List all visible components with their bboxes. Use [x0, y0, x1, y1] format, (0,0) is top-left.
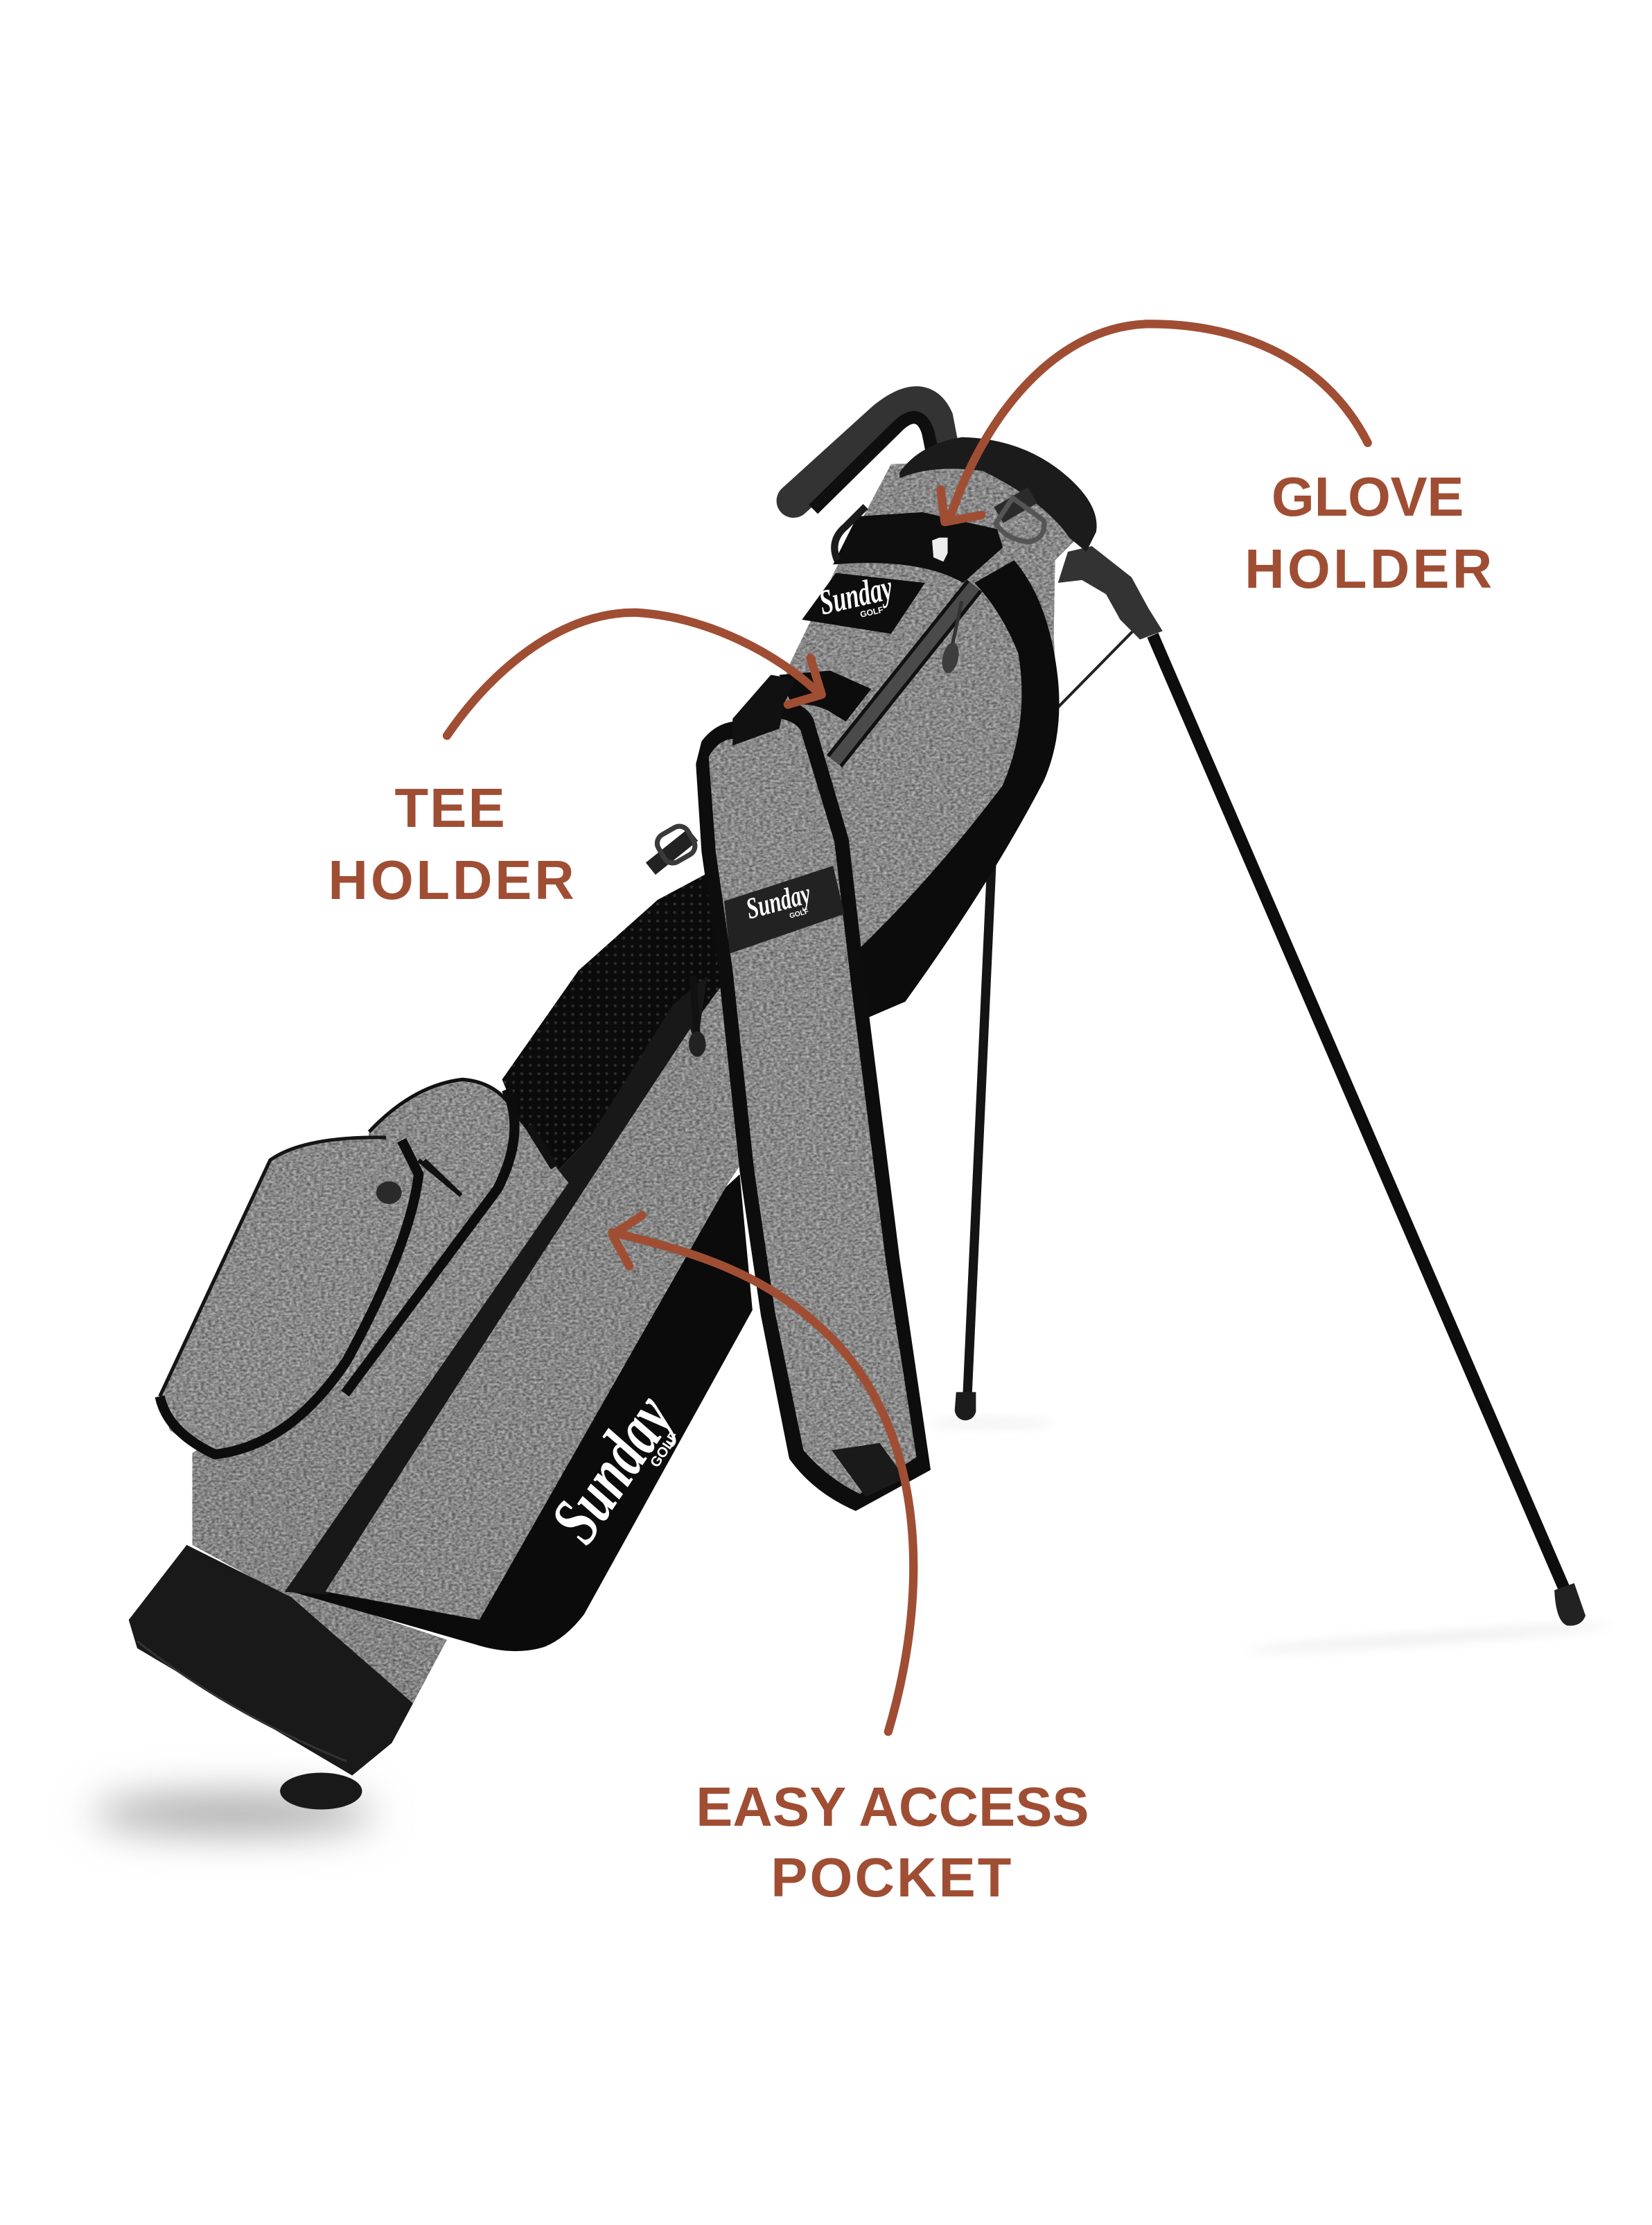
strap logo band: [724, 866, 845, 954]
glove holder velcro band: [833, 512, 1003, 583]
strap logo: [743, 878, 816, 930]
rear side pocket: [340, 1079, 569, 1431]
bag stand legs: [955, 624, 1585, 1625]
icon: glove: [932, 538, 948, 561]
logo patch: Sunday Golf: GOLF: [859, 604, 885, 620]
mesh pocket: [502, 866, 728, 1171]
label: glove holder: [1245, 466, 1492, 600]
label: glove holder: GLOVE: [1272, 466, 1464, 527]
lower Sunday logo: Sunday: [536, 1381, 689, 1556]
lower bag body behind: [281, 1585, 447, 1703]
lower Sunday logo: GOLF: [647, 1429, 682, 1470]
logo patch: Sunday Golf: [802, 568, 925, 634]
top collar: [899, 437, 1097, 552]
pocket black edge trim: [857, 560, 1060, 1019]
arrow: easy access pocket: [613, 1215, 913, 1731]
strap bottom patch: [832, 1443, 905, 1497]
shoulder strap: [696, 675, 931, 1511]
tee holder elastic band: [780, 670, 871, 722]
lower side fabric: [193, 1183, 569, 1594]
d-ring buckle: [834, 495, 1044, 560]
ground shadows: [92, 1420, 1613, 1833]
zipper pull on main pocket: [689, 976, 706, 1057]
carry handle: [793, 403, 943, 509]
leg bracket: [1058, 546, 1163, 640]
label: glove holder: HOLDER: [1245, 538, 1492, 600]
label: easy access pocket: POCKET: [771, 1847, 1011, 1908]
label: tee holder: HOLDER: [328, 849, 574, 911]
label: tee holder: TEE: [394, 777, 505, 839]
lower Sunday logo: [536, 1381, 690, 1558]
front side pocket: [160, 1137, 461, 1458]
black lower panel: [291, 1174, 753, 1651]
arrow: tee holder: [447, 613, 822, 735]
strap top webbing: [732, 675, 796, 746]
arrow: glove holder: [940, 324, 1368, 522]
dark strip beside pocket: [280, 976, 708, 1594]
side buckle: [651, 823, 698, 869]
main access pocket panel: [325, 1029, 739, 1620]
upper bag body: [690, 461, 1078, 1166]
strap logo: GOLF: [789, 908, 809, 920]
label: tee holder: [328, 777, 574, 911]
logo patch: Sunday Golf: Sunday: [816, 568, 896, 623]
label: easy access pocket: [696, 1776, 1089, 1908]
strap logo: Sunday: [743, 878, 814, 925]
upper zipper: [834, 586, 974, 761]
bottom boot: [129, 1545, 413, 1776]
bottom foot: [280, 1772, 362, 1810]
label: easy access pocket: EASY ACCESS: [696, 1776, 1089, 1838]
